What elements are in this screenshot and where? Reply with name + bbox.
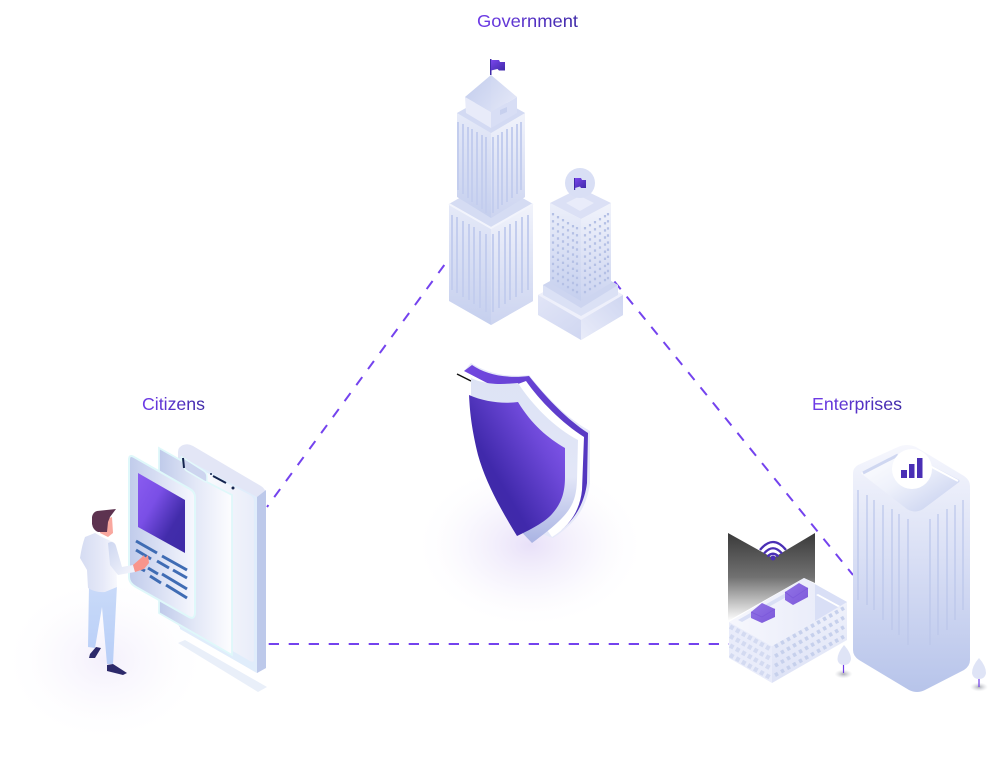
icon: flag in circle bbox=[565, 168, 595, 198]
small black mark bbox=[457, 374, 471, 381]
person head bbox=[92, 509, 116, 537]
small tower windows bbox=[553, 213, 608, 295]
person shoes bbox=[89, 647, 127, 675]
tower lower tier bbox=[449, 180, 533, 325]
card purple image bbox=[138, 473, 185, 553]
tower vertical lines bbox=[858, 490, 963, 645]
large enterprise tower bbox=[853, 445, 970, 692]
building windows right bbox=[775, 608, 844, 675]
middle screen panel bbox=[159, 448, 234, 655]
small tower base bbox=[538, 264, 623, 340]
person bbox=[80, 509, 149, 675]
building windows left bbox=[730, 626, 770, 678]
illustration: shield bbox=[457, 363, 590, 543]
heading: Citizens: Citizens bbox=[142, 394, 205, 414]
small tower body bbox=[550, 188, 611, 301]
shield white stripe bbox=[518, 381, 584, 537]
illustration: government towers bbox=[449, 59, 623, 340]
tree near tower bbox=[834, 645, 852, 678]
low office building bbox=[729, 578, 847, 683]
glow: citizens floor shadow bbox=[0, 575, 210, 745]
shield light rim bbox=[471, 378, 578, 543]
person hand bbox=[133, 555, 149, 572]
floor plate bbox=[178, 640, 267, 692]
tree right of tower bbox=[970, 658, 988, 692]
person legs bbox=[88, 585, 117, 664]
rooftop unit right bbox=[785, 583, 808, 605]
back screen panel bbox=[178, 444, 266, 673]
glow: shield floor shadow bbox=[412, 460, 648, 630]
tower roof recess bbox=[863, 453, 958, 510]
line: government to enterprises bbox=[614, 282, 853, 575]
heading: Enterprises: Enterprises bbox=[812, 394, 902, 414]
person arm bbox=[108, 542, 135, 575]
shield back edge bbox=[464, 365, 588, 531]
illustration: citizen at a digital screen bbox=[80, 444, 267, 692]
line: government to citizens bbox=[267, 265, 444, 507]
notch bbox=[182, 457, 207, 482]
large tower bbox=[449, 59, 533, 325]
person jacket bbox=[80, 533, 117, 592]
front card panel bbox=[129, 456, 195, 618]
icon: bar chart in circle bbox=[892, 449, 932, 489]
icon: flag on tower bbox=[490, 59, 505, 75]
dark backdrop panel bbox=[728, 533, 815, 621]
tower upper tier bbox=[457, 94, 525, 218]
small tower bbox=[538, 168, 623, 340]
shield purple front bbox=[469, 395, 565, 536]
illustration: enterprise buildings bbox=[728, 445, 988, 692]
line: citizens to enterprises bbox=[269, 643, 729, 645]
card text lines bbox=[136, 541, 187, 598]
heading: Government: Government bbox=[477, 11, 578, 31]
tower roof bbox=[465, 75, 517, 128]
icon: wifi bbox=[760, 542, 786, 560]
rooftop unit left bbox=[751, 603, 775, 623]
dashed connection lines bbox=[267, 265, 853, 644]
shield lavender outer edge bbox=[464, 363, 590, 538]
